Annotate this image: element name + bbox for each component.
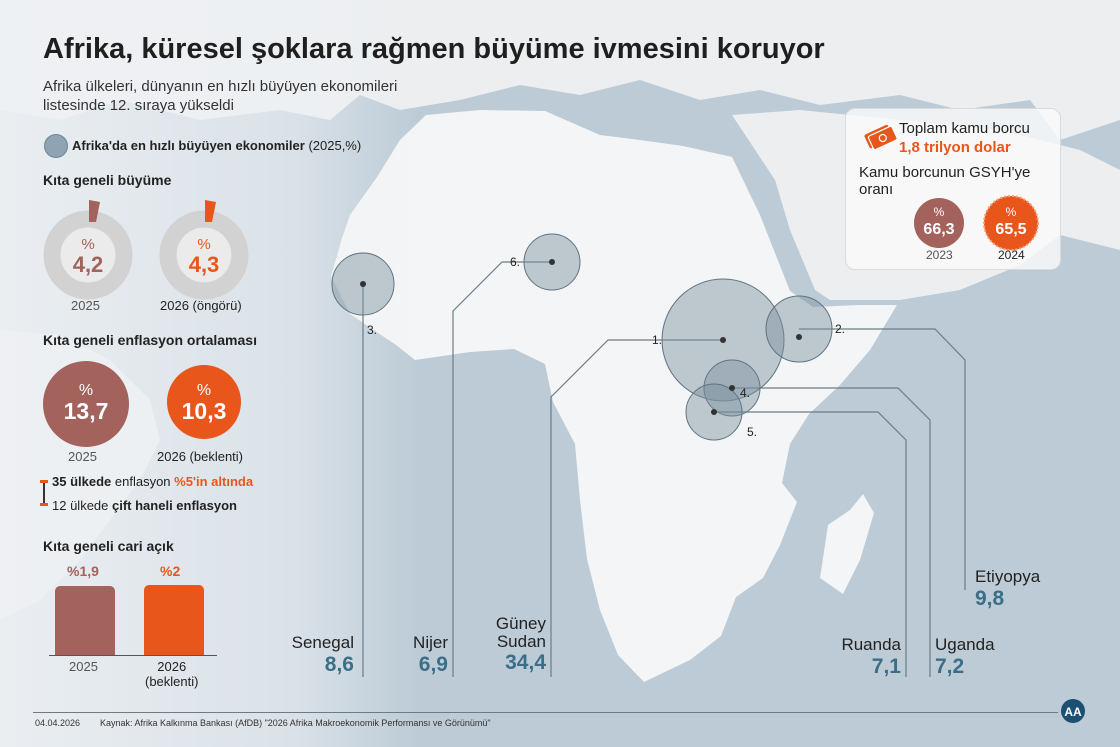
panel: current account: 2026 [157, 659, 186, 674]
panel: inflation: % [79, 382, 93, 399]
bubble map: 5. [747, 425, 757, 439]
panel: current account: 2025 [69, 659, 98, 674]
bubble map: 1. [652, 333, 662, 347]
panel: public debt: 65,5 [995, 221, 1027, 238]
panel: public debt: 1,8 trilyon dolar [899, 139, 1011, 156]
label: Senegal: Senegal [292, 633, 354, 652]
panel: growth: % [81, 236, 95, 253]
label: Etiyopya: Etiyopya [975, 567, 1040, 586]
panel: current account: Kıta geneli cari açık [43, 538, 174, 554]
panel: growth: 4,2 [73, 252, 103, 277]
label: Güney Sudan: Güney [496, 614, 546, 633]
label: Etiyopya: 9,8 [975, 587, 1004, 610]
label: Nijer: 6,9 [419, 653, 448, 676]
subtitle: Afrika ülkeleri, dünyanın en hızlı büyüyen ekonomileri [43, 78, 397, 95]
label: Güney Sudan: 34,4 [505, 651, 546, 674]
icon: AA logo [1061, 699, 1085, 723]
panel: inflation: 10,3 [182, 398, 226, 424]
panel: growth: Kıta geneli büyüme [43, 172, 171, 188]
bubble map: 3. [367, 323, 377, 337]
panel: inflation: 2026 (beklenti) [157, 449, 243, 464]
footer [33, 712, 1058, 713]
Africa [331, 110, 897, 682]
legend [44, 134, 361, 158]
panel: current account: %2 [160, 563, 180, 579]
text: 04.04.2026 [35, 718, 80, 728]
label: Uganda [935, 635, 995, 678]
label: Ruanda: 7,1 [872, 655, 901, 678]
panel: public debt: Kamu borcunun GSYH'ye [859, 164, 1030, 181]
panel: current account [43, 538, 217, 689]
text: Kaynak: Afrika Kalkınma Bankası (AfDB) "2026 Afrika Makroekonomik Performansı ve Görünümü" [100, 718, 491, 728]
label: Güney Sudan: Sudan [497, 632, 546, 651]
legend: Afrika'da en hızlı büyüyen ekonomiler (2025,%) [72, 138, 361, 153]
panel: growth: 4,3 [189, 252, 219, 277]
panel: public debt: oranı [859, 181, 893, 198]
panel: current account: (beklenti) [145, 674, 198, 689]
bubble map: 6. [510, 255, 520, 269]
panel: current account: %1,9 [67, 563, 99, 579]
bubble map: 4. [740, 386, 750, 400]
label: Ruanda: Ruanda [841, 635, 901, 654]
panel: inflation [40, 332, 257, 513]
label: Uganda: Uganda [935, 635, 995, 654]
panel: public debt: 2023 [926, 248, 953, 262]
bullets: 35 ülkede enflasyon %5'in altında [52, 474, 253, 489]
label: Etiyopya [975, 567, 1040, 610]
subtitle: listesinde 12. sıraya yükseldi [43, 97, 234, 114]
panel: public debt [845, 108, 1061, 270]
panel: inflation: Kıta geneli enflasyon ortalaması [43, 332, 257, 348]
South America [0, 330, 160, 620]
panel: growth: 2026 (öngörü) [160, 298, 242, 313]
title: Afrika, küresel şoklara rağmen büyüme ivmesini koruyor [43, 33, 825, 65]
label: Senegal [292, 633, 354, 676]
panel: growth [43, 172, 248, 313]
bullets: 12 ülkede çift haneli enflasyon [52, 498, 237, 513]
label: Güney Sudan [496, 614, 546, 674]
panel: public debt: % [934, 205, 945, 219]
label: Nijer [413, 633, 448, 676]
Madagascar [820, 494, 874, 594]
label: Nijer: Nijer [413, 633, 448, 652]
panel: public debt: 66,3 [923, 221, 955, 238]
panel: public debt: 2024 [998, 248, 1025, 262]
label: Ruanda [841, 635, 901, 678]
panel: inflation: 13,7 [64, 398, 108, 424]
icon: money [864, 124, 896, 150]
panel: public debt: Toplam kamu borcu [899, 120, 1030, 137]
panel: inflation: % [197, 382, 211, 399]
label: Uganda: 7,2 [935, 655, 964, 678]
bubble map: 2. [835, 322, 845, 336]
panel: inflation: 2025 [68, 449, 97, 464]
subtitle [43, 78, 397, 114]
Europe [0, 0, 1120, 140]
panel: public debt: % [1006, 205, 1017, 219]
Arabia [732, 110, 1120, 300]
bullets [40, 474, 254, 513]
label: Senegal: 8,6 [325, 653, 354, 676]
panel: growth: 2025 [71, 298, 100, 313]
icon: AA logo: AA [1064, 705, 1082, 719]
panel: growth: % [197, 236, 211, 253]
